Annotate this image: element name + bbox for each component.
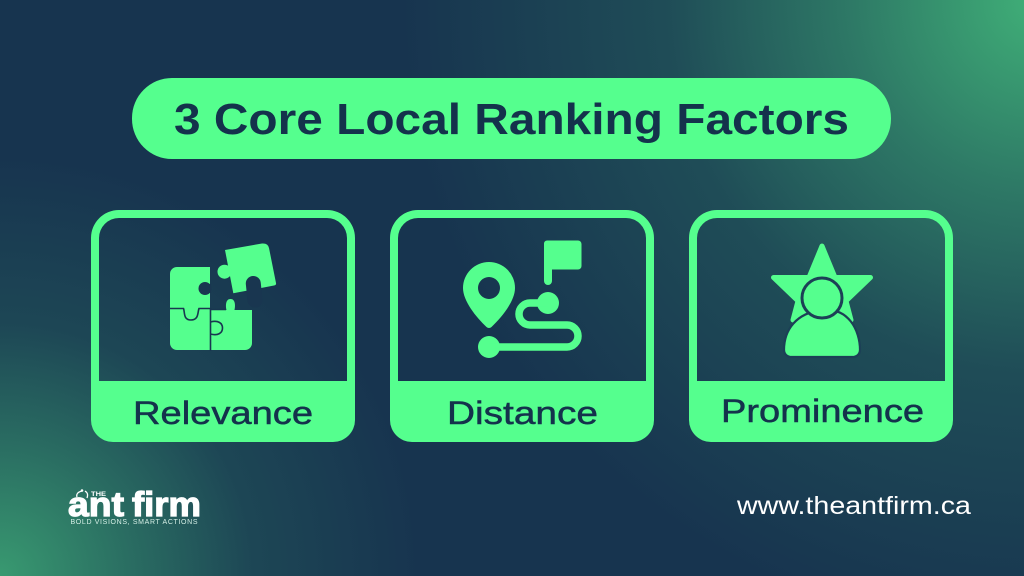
title <box>132 78 891 159</box>
title: 3 Core Local Ranking Factors <box>174 95 849 144</box>
label: relevance: Relevance <box>133 395 313 431</box>
panel: distance <box>390 210 654 442</box>
logo: the ant firm: firm <box>132 486 201 524</box>
icon: person with star <box>774 246 870 357</box>
label: distance: Distance <box>447 395 598 431</box>
panel: prominence <box>689 210 953 442</box>
label: prominence: Prominence <box>721 393 924 429</box>
logo: the ant firm: ant <box>68 486 124 524</box>
logo: the ant firm: THE <box>91 491 107 498</box>
logo: the ant firm <box>68 486 201 526</box>
logo: the ant firm: BOLD VISIONS, SMART ACTIONS <box>70 519 198 526</box>
icon: puzzle pieces <box>170 243 276 351</box>
icon: map pin, route and flag <box>463 240 582 358</box>
panel: relevance <box>91 210 355 442</box>
website url: www.theantfirm.ca <box>736 492 971 520</box>
